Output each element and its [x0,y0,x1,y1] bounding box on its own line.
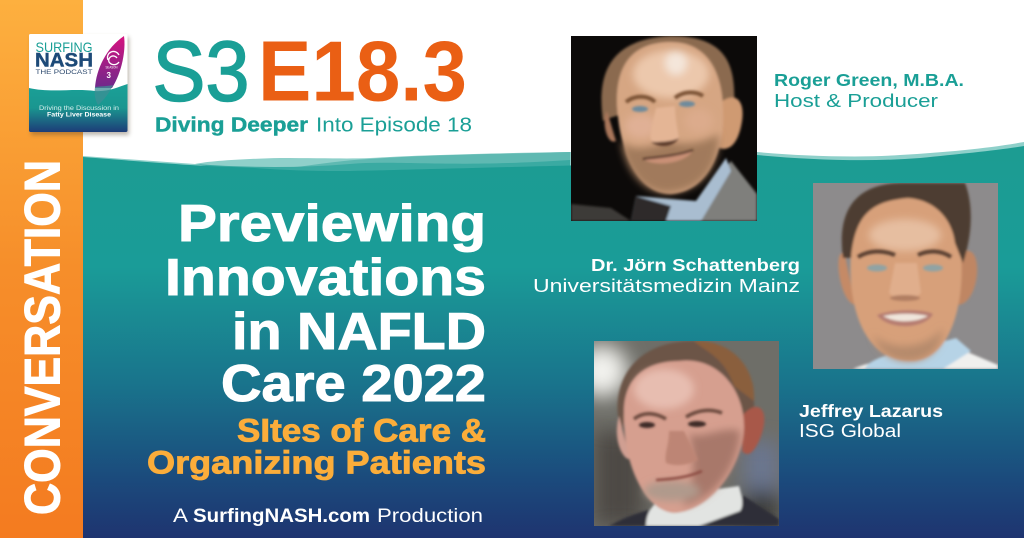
photo: Dr. Schattenberg [813,183,998,369]
caption: Roger Green: Host & Producer [774,90,938,111]
photo: Roger Green [571,36,757,221]
episode code: E18.3 [258,24,467,120]
caption: Dr. Schattenberg: Dr. Jörn Schattenberg [591,255,800,275]
main title: Previewing [178,195,486,253]
photo: Jeffrey Lazarus [576,341,779,526]
podcast logo card: Fatty Liver Disease [47,112,111,118]
production credit [173,506,483,527]
caption: Jeffrey Lazarus: Jeffrey Lazarus [799,401,943,421]
podcast logo card: NASH [35,50,93,72]
podcast logo card [29,34,129,135]
icon: surfboard [95,36,124,105]
caption: Jeffrey Lazarus: ISG Global [799,420,901,441]
secondary title [147,412,486,480]
secondary title: Organizing Patients [147,444,486,480]
main title: in NAFLD [232,303,486,361]
production credit: SurfingNASH.com [193,506,370,527]
orange sidebar [0,0,83,538]
main title [165,195,486,413]
podcast logo card: THE PODCAST [36,69,93,76]
icon: surfboard: SEASON [106,64,118,70]
vertical label: CONVERSATION: CONVERSATION [14,160,70,515]
caption: Roger Green: Roger Green, M.B.A. [774,70,964,90]
podcast logo card: Driving the Discussion in [39,105,119,112]
episode code [152,24,467,120]
logo wordmark: SURFING [36,39,92,55]
production credit: A [173,506,188,527]
icon: surfboard: 3 [106,71,112,80]
caption: Dr. Schattenberg: Universitätsmedizin Mainz [533,275,800,296]
ocean panel with wave [83,142,1024,538]
production credit: Production [377,506,483,527]
caption: Jeffrey Lazarus [799,401,943,441]
main title: Innovations [165,249,486,307]
secondary title: SItes of Care & [237,412,486,448]
episode subtitle: Into Episode 18 [316,114,472,136]
episode subtitle [155,114,472,136]
episode subtitle: Diving Deeper [155,114,308,136]
main title: Care 2022 [221,355,486,413]
caption: Dr. Schattenberg [533,255,800,296]
episode code: S3 [152,24,250,120]
caption: Roger Green [774,70,964,111]
